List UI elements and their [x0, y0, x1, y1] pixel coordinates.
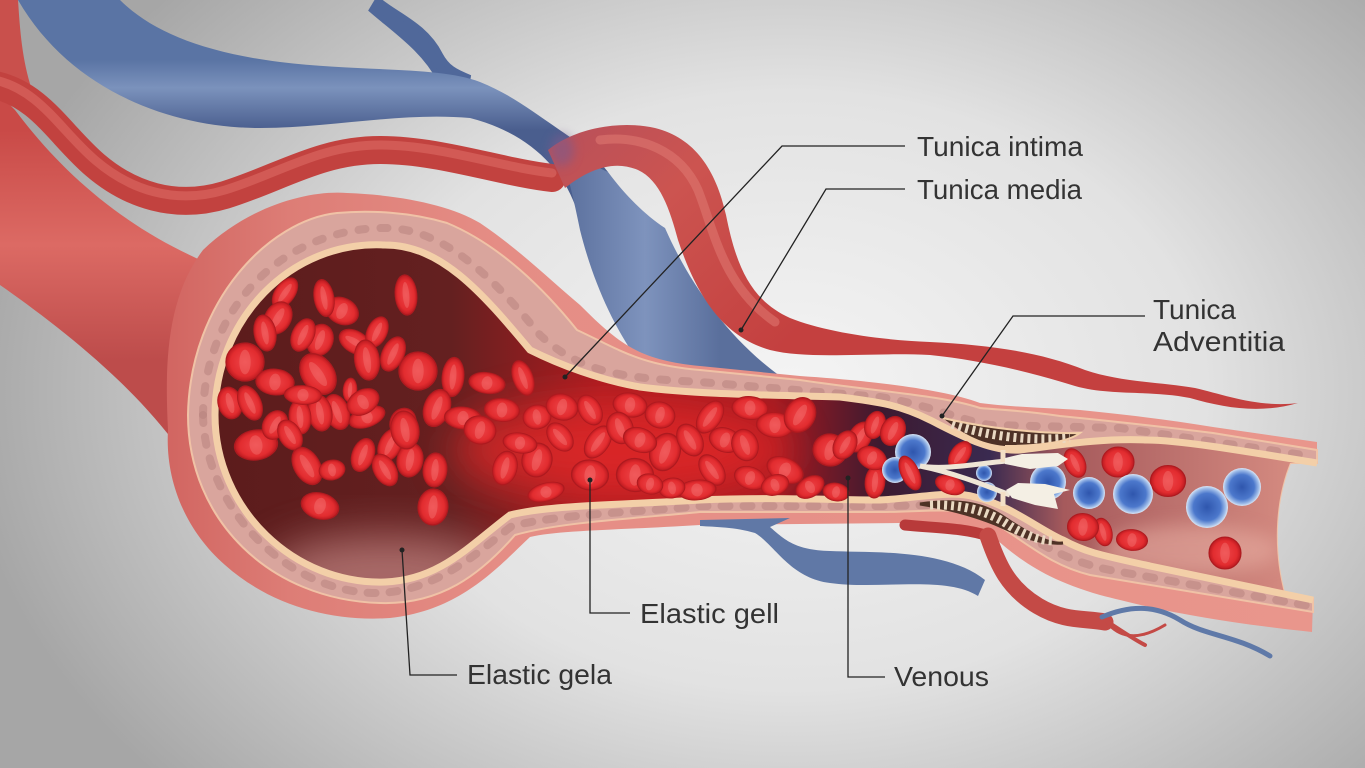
lower blue vein — [700, 518, 985, 596]
label: Tunica Adventitia — [940, 294, 1285, 418]
lower red branch — [905, 525, 1165, 645]
label: Elastic gell — [588, 478, 779, 629]
label: Venous: Venous — [894, 661, 989, 692]
lower valve comb — [920, 502, 1063, 543]
tunica media band — [188, 212, 1317, 612]
vein branch — [372, 0, 470, 80]
lower light — [272, 510, 486, 579]
thin blue tail — [1102, 608, 1270, 656]
label: Elastic gell: Elastic gell — [640, 598, 779, 629]
left white cells — [895, 434, 931, 470]
right red cells — [1102, 447, 1134, 477]
upper valve comb — [943, 418, 1080, 446]
white valve fibres — [920, 450, 1070, 509]
upper fan — [1005, 453, 1068, 469]
lumen shading — [265, 400, 1280, 615]
label: Elastic gela — [400, 548, 612, 690]
right white cells — [1073, 477, 1105, 509]
label: Tunica media — [738, 174, 1082, 332]
blue vein — [18, 0, 780, 376]
label: Tunica Adventitia: Tunica — [1153, 294, 1236, 325]
vein trunk — [18, 0, 608, 205]
blue to red blend — [550, 134, 574, 166]
label: Tunica media: Tunica media — [917, 174, 1082, 205]
red glow — [450, 400, 790, 500]
large feeding artery — [0, 0, 205, 450]
vessel lumen — [215, 245, 1317, 615]
blue and red cells in the far lumen — [882, 434, 1261, 569]
right lumen texture — [1100, 525, 1280, 575]
fibre branches — [920, 461, 1010, 495]
red blood cells — [214, 273, 910, 526]
tunica intima cream lining — [215, 245, 1317, 600]
fibre stems — [1000, 450, 1006, 506]
label: Tunica intima: Tunica intima — [917, 131, 1083, 162]
lower fan — [1006, 483, 1070, 509]
label: Tunica Adventitia: Adventitia — [1153, 326, 1285, 357]
thin red artery — [0, 80, 552, 201]
dark valve cells — [894, 453, 926, 493]
label: Elastic gela: Elastic gela — [467, 659, 612, 690]
label: Venous — [846, 476, 989, 692]
vein descending segment — [560, 150, 780, 376]
vessel outer wall — [167, 193, 1317, 632]
red artery loop and tail — [548, 125, 1298, 409]
label: Tunica intima — [562, 131, 1083, 380]
